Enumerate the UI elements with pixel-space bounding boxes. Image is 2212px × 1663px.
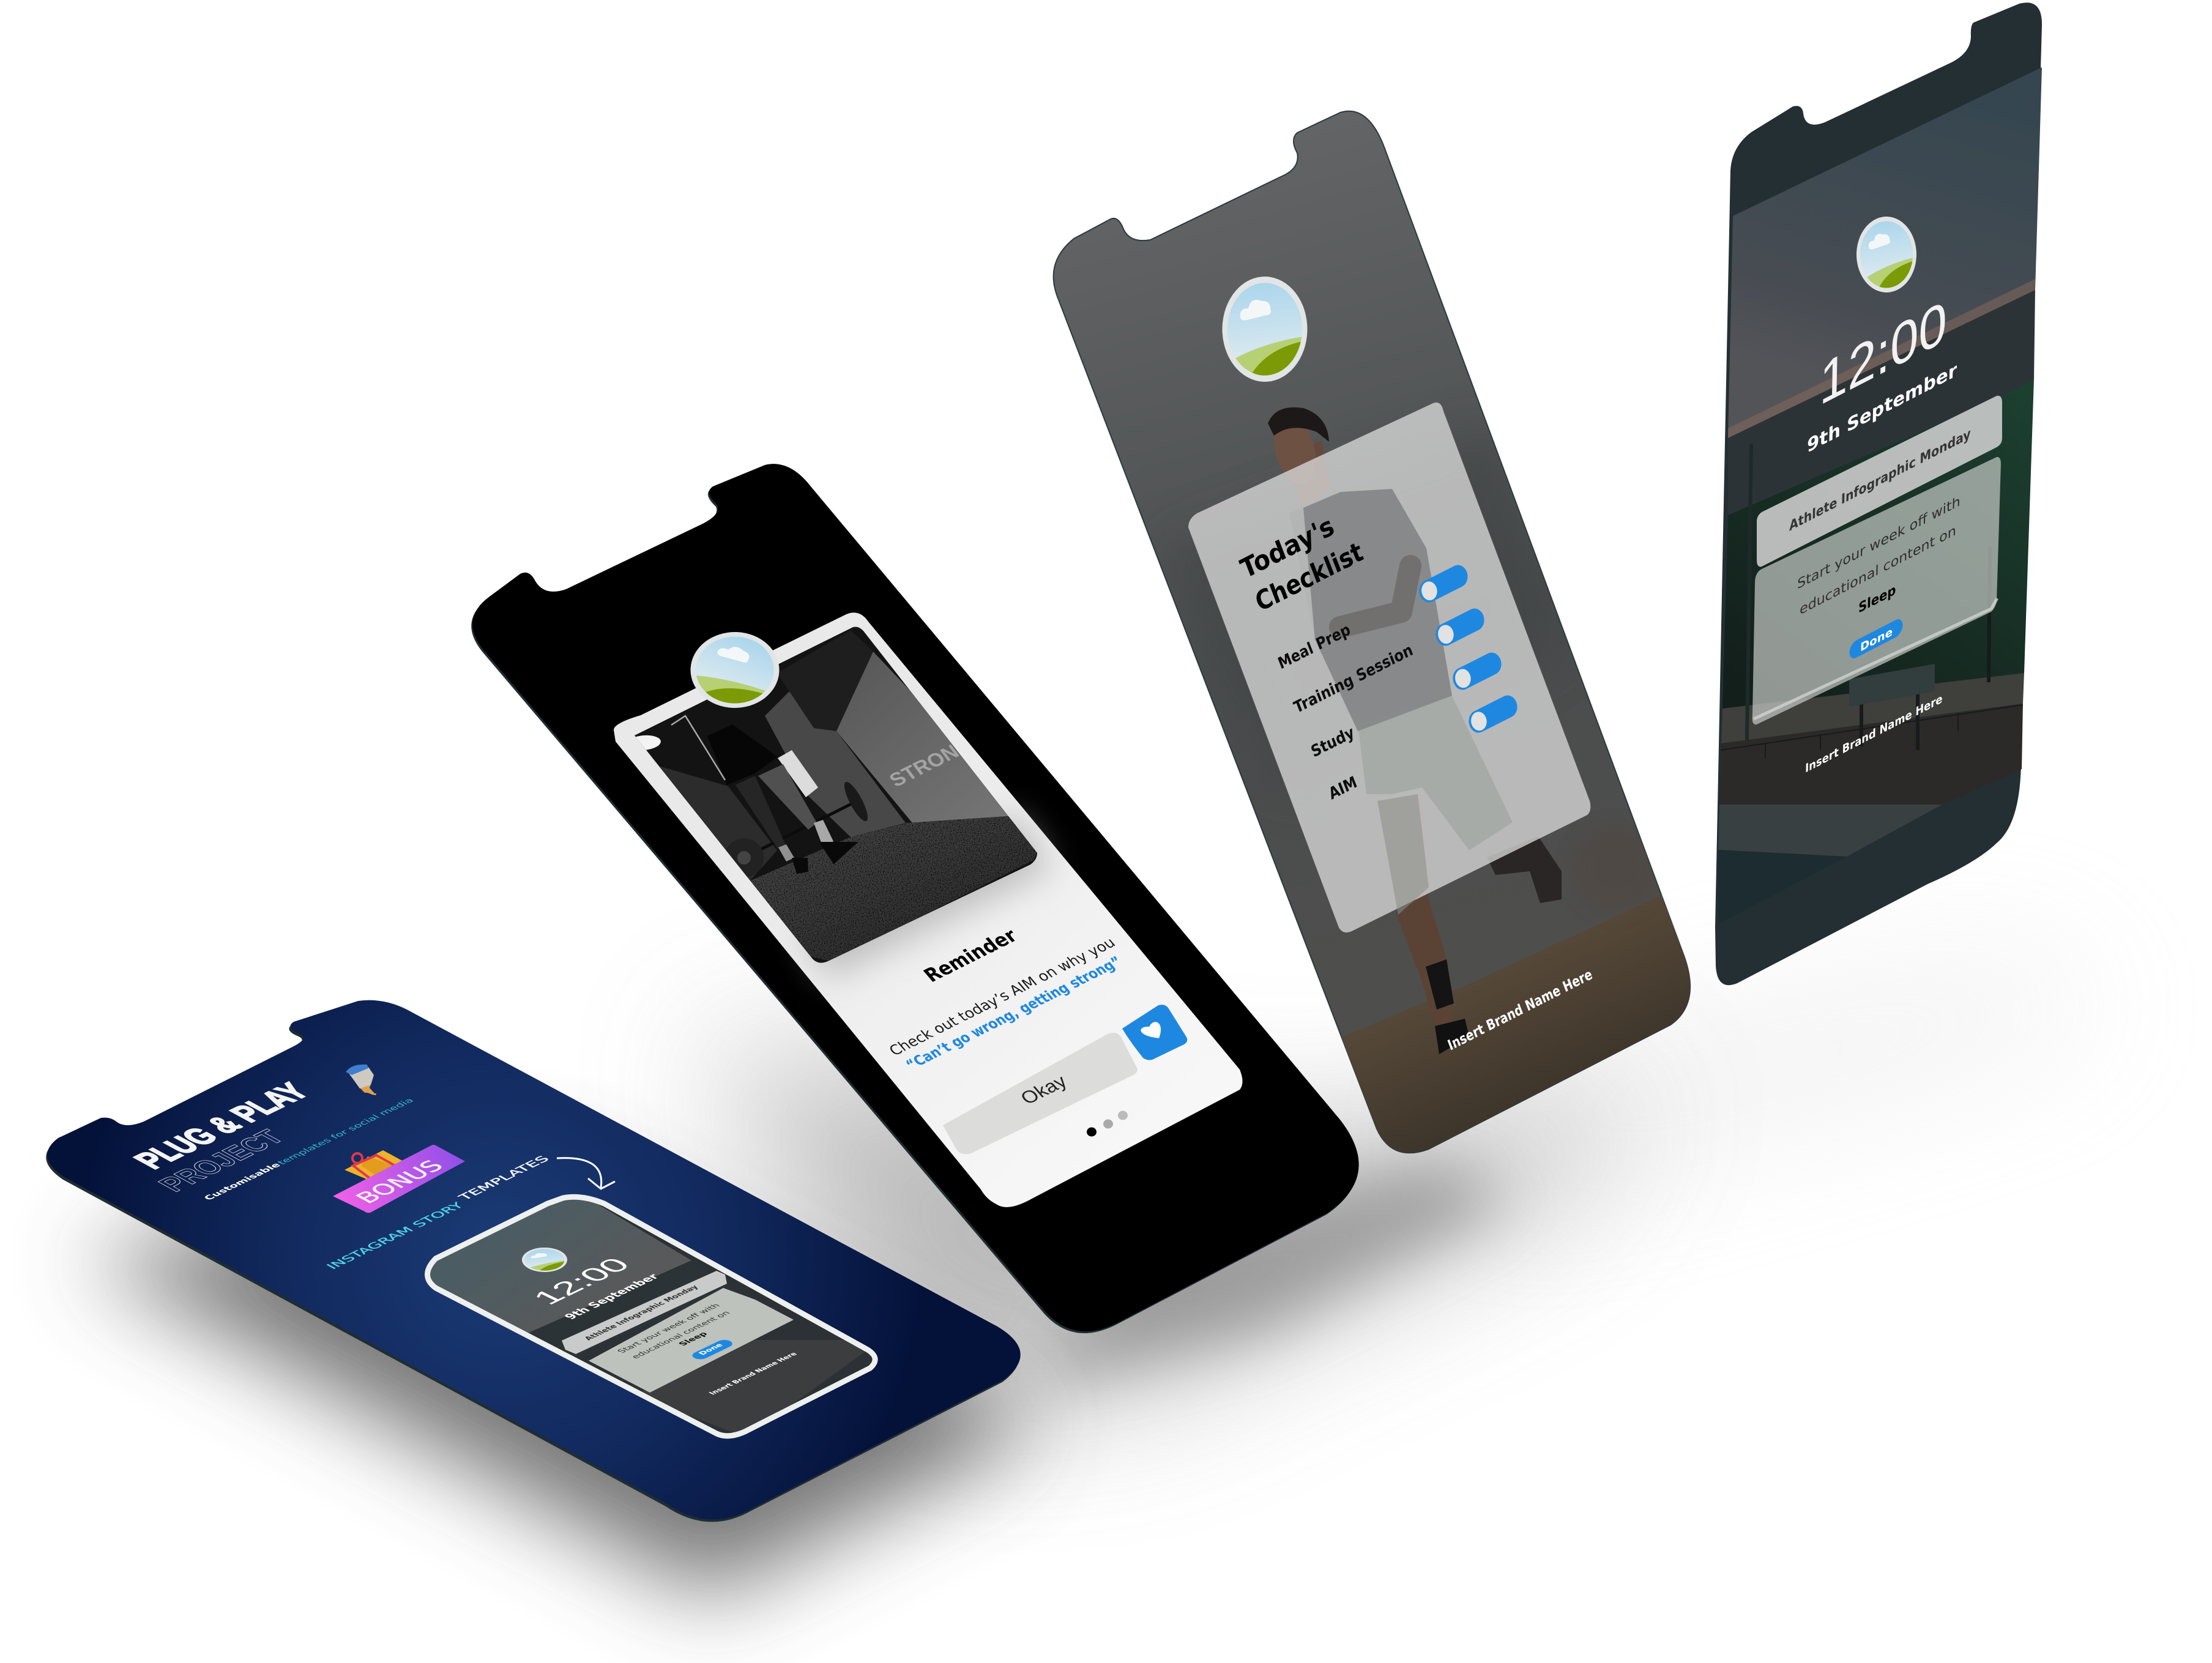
photo back room right [765,691,906,837]
tagline white: Customisable [201,1161,283,1202]
phone 1: Plug and Play bonus screen [46,1000,1021,1522]
checklist item: AIM: AIM [1326,773,1360,803]
reminder quote: “Can’t go wrong, getting strong” [902,953,1126,1073]
mini done button [689,1338,735,1361]
photo: runner and sand [1163,407,1713,1193]
heart button [1122,1005,1187,1060]
bright window [778,750,818,797]
phone 4 body [1715,2,2042,985]
phone 1 body [47,1000,1021,1519]
runner [1267,407,1562,1054]
sand [1334,893,1713,1193]
photo: town strip [1728,290,2035,515]
tagline cyan: templates for social media [275,1096,416,1166]
toggle 4 [1465,692,1521,736]
date: 9th September [1807,359,1957,458]
photo: verge [1721,673,2024,743]
icon: heart [1139,1021,1167,1043]
mini time: 12:00 [526,1254,638,1309]
toggle 2 [1432,605,1488,649]
panel lower glass edge [1754,598,1997,719]
photo: track [1719,704,2023,805]
runner seen through glass [1303,489,1513,915]
checklist item: Study: Study [1308,723,1357,761]
phone 3: checklist screen [1054,111,1713,1193]
label white: Templates: TEMPLATES [455,1154,553,1202]
shadow: under black phone wide [704,1040,1652,1395]
avatar [1853,212,1920,297]
heading: Project outline: PROJECT [151,1125,292,1196]
photo: fence and posts [1721,444,2023,759]
panel line 1: Start your week off with [1797,493,1961,593]
card photo shadow [802,814,1052,979]
okay label: Okay [1016,1071,1072,1109]
dust [1573,826,1658,912]
icon: paint brush [346,1065,376,1095]
phone 2 body [472,464,1359,1331]
panel title: Athlete Infographic Monday [1789,426,1971,535]
mini top panel [562,1271,727,1354]
mini avatar [518,1246,571,1274]
badge text: BONUS [351,1158,450,1207]
arrow [557,1158,615,1189]
notification title panel [1757,396,2002,567]
label cyan: Instagram Story: INSTAGRAM STORY [323,1200,467,1271]
photo floor [750,816,1037,961]
photo wall [836,652,1016,823]
done label: Done [1860,625,1893,655]
mini phone base [427,1197,875,1436]
dark cloud bank [1163,428,1566,795]
mini panel line 2: educational content on [630,1310,732,1360]
mini done label: Done [696,1342,725,1356]
okay button [943,1033,1138,1154]
shadow: blue phone [80,1163,1040,1597]
avatar [676,620,794,720]
photo ceiling [777,630,873,731]
checklist item: Meal Prep: Meal Prep [1275,620,1353,673]
toggle 1 [1416,562,1471,606]
mini phone mockup [422,1187,881,1438]
mini phone frame [427,1197,875,1436]
heading: Reminder: Reminder [919,924,1022,986]
mini brand: Insert Brand Name Here [707,1351,799,1396]
gym photo [612,612,1052,979]
clock: 12:00 [1819,287,1948,418]
toggle 3 [1450,649,1505,693]
phone 2: reminder screen [471,464,1359,1333]
mini panel line 3: Sleep [677,1331,710,1347]
mini panel title: Athlete Infographic Monday [583,1284,701,1342]
photo back room left [655,765,777,881]
photo base [612,612,1052,979]
phone 2 edge [471,466,1358,1333]
notification body panel [1752,457,2001,724]
shadow: right phones [1438,954,2111,1187]
badge: Bonus [333,1145,465,1213]
photo: pitch [1722,380,2034,709]
pagination dots [1087,1111,1128,1137]
photo: scoreboard [1849,664,1935,707]
checklist item: Training Session: Training Session [1291,641,1415,717]
wall lettering: STRON [885,741,963,791]
shadow: under black phone core [1040,1163,1511,1383]
photo: sunset glow [1728,279,2035,438]
phone 1 edge [46,1003,1019,1522]
phone 4: lock screen [1715,2,2042,985]
heading: Checklist: Checklist [1251,537,1367,618]
brand label: Insert Brand Name Here [1446,966,1595,1054]
icon: gift box [344,1150,403,1180]
panel line 2: educational content on [1800,523,1956,619]
done button [1849,616,1903,661]
mini panel line 1: Start your week off with [616,1303,723,1355]
photo: sky [1728,67,2042,438]
white card [614,612,1242,1207]
mini lower panel [589,1288,794,1393]
heading: Today's: Today's [1237,511,1338,585]
avatar [1220,273,1310,385]
athlete [671,716,854,874]
reminder body line: Check out today’s AIM on why you [885,934,1119,1059]
brand label: Insert Brand Name Here [1805,692,1943,776]
bright corner [626,734,661,751]
mini phone photo [430,1199,865,1432]
photo: foreground [1718,850,1847,924]
phone 3 body [1054,111,1690,1153]
heading: Plug and Play: PLUG & PLAY [126,1079,318,1174]
glass checklist panel [1188,403,1590,932]
panel line 3: Sleep [1858,582,1896,617]
mini date: 9th September [561,1272,662,1321]
barbell [724,779,872,877]
photo: pavement [1718,805,1942,857]
